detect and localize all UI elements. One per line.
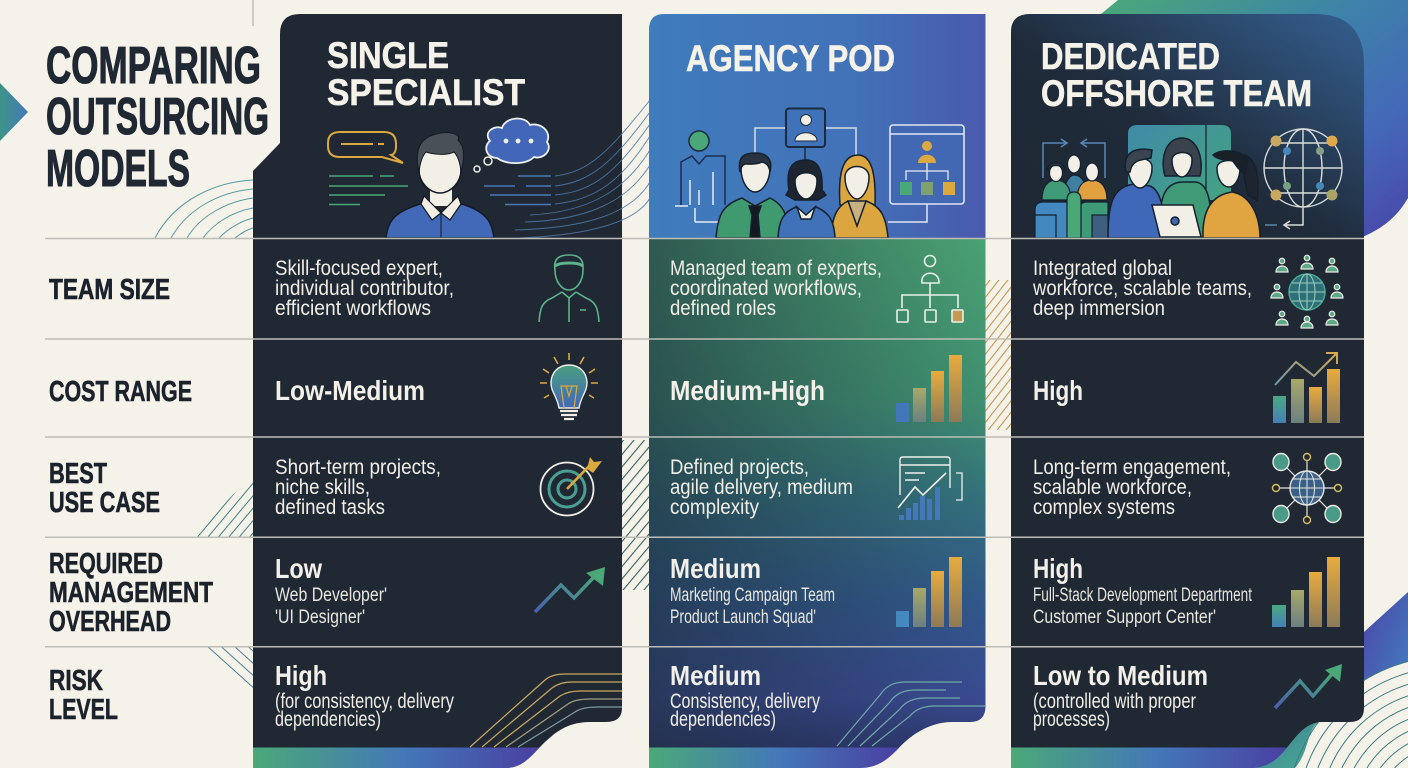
row value: use case single: defined tasks <box>275 495 385 519</box>
row label: cost range: COST RANGE <box>49 376 192 408</box>
row label: required management overhead <box>49 548 213 638</box>
top vertical tick <box>252 0 254 26</box>
row value: cost pod: Medium-High <box>670 375 825 406</box>
icon: target <box>540 457 602 516</box>
icon: window org chart <box>888 125 964 222</box>
row label: risk level: RISK <box>49 665 103 697</box>
heading: single specialist: SINGLE <box>327 35 449 76</box>
left arrow marker <box>0 83 28 141</box>
decorative top-right gradient shape <box>1101 0 1408 238</box>
row value: overhead pod: Medium <box>670 553 761 584</box>
row value: team size offshore <box>1032 256 1252 320</box>
panel: agency pod <box>649 14 986 768</box>
text lines: blue <box>484 176 551 204</box>
icon: speech bubble <box>328 132 403 163</box>
heading: single specialist: SPECIALIST <box>327 72 525 113</box>
row value: overhead pod: Product Launch Squad' <box>670 607 816 628</box>
icon: person outline <box>539 255 599 322</box>
text lines: green <box>329 176 408 204</box>
title <box>46 37 269 198</box>
row value: overhead offshore: Customer Support Center' <box>1033 607 1216 628</box>
row value: risk pod: dependencies) <box>670 707 776 731</box>
row value: team size pod: coordinated workflows, <box>670 276 862 300</box>
row value: cost offshore: High <box>1033 375 1083 406</box>
icon: light bulb <box>540 353 598 419</box>
bar chart: cost pod <box>896 355 962 422</box>
row value: use case pod: agile delivery, medium <box>670 475 853 499</box>
row value: team size pod: defined roles <box>670 296 776 320</box>
row value: overhead single: 'UI Designer' <box>275 607 365 628</box>
row value: team size single <box>275 256 454 320</box>
illustration: main team members <box>1108 138 1260 238</box>
row label: risk level <box>49 665 118 726</box>
decorative hatching between columns <box>622 280 1011 590</box>
panel: single specialist <box>253 14 622 768</box>
illustration: org connectors and ghost person <box>675 128 856 222</box>
heading: dedicated offshore team: DEDICATED <box>1041 36 1220 77</box>
row value: risk pod: Consistency, delivery <box>670 689 820 713</box>
row value: use case pod: complexity <box>670 495 759 519</box>
row value: team size single: Skill-focused expert, <box>275 256 443 280</box>
heading: dedicated offshore team <box>1041 36 1312 114</box>
illustration: small group with arrows <box>1035 139 1108 238</box>
row value: risk offshore: (controlled with proper <box>1033 689 1196 713</box>
row label: best use case: USE CASE <box>49 487 160 519</box>
title: COMPARING <box>46 37 261 95</box>
illustration: three team members <box>716 153 888 238</box>
row value: risk pod: Medium <box>670 660 761 691</box>
row value: risk single <box>275 660 454 731</box>
panel: dedicated offshore team <box>1011 14 1364 768</box>
decorative bottom-right shapes <box>1250 592 1408 768</box>
row value: overhead offshore <box>1033 553 1253 628</box>
row value: overhead single: Low <box>275 553 322 584</box>
title: OUTSURCING <box>46 88 269 146</box>
icon: thought cloud <box>474 119 549 172</box>
row value: risk offshore: Low to Medium <box>1033 660 1208 691</box>
row value: overhead pod: Marketing Campaign Team <box>670 585 835 606</box>
decorative hatching left <box>190 475 253 697</box>
icon: org person box <box>786 108 825 147</box>
row label: required management overhead: REQUIRED <box>49 548 163 580</box>
row value: risk offshore: processes) <box>1033 707 1110 731</box>
row value: team size offshore: workforce, scalable teams, <box>1032 276 1252 300</box>
row value: overhead pod <box>670 553 835 628</box>
decorative arcs left <box>155 180 253 238</box>
row label: risk level: LEVEL <box>49 694 118 726</box>
row value: use case single: Short-term projects, <box>275 455 441 479</box>
bar chart: overhead pod <box>896 557 962 627</box>
heading: dedicated offshore team: OFFSHORE TEAM <box>1041 73 1312 114</box>
icon: dashboard chart <box>898 457 962 520</box>
row value: team size offshore: deep immersion <box>1033 296 1165 320</box>
decorative wave lines <box>515 100 650 238</box>
icon: globe network <box>1264 129 1342 229</box>
row label: required management overhead: OVERHEAD <box>49 606 171 638</box>
row value: overhead single: Web Developer' <box>275 585 387 606</box>
illustration: teal backdrop <box>1128 125 1231 238</box>
row label: team size: TEAM SIZE <box>49 274 170 306</box>
icon: hub globe <box>1272 454 1342 524</box>
row value: use case offshore: scalable workforce, <box>1033 475 1192 499</box>
row label: best use case: BEST <box>49 458 107 490</box>
row value: risk single: High <box>275 660 327 691</box>
row value: overhead offshore: High <box>1033 553 1083 584</box>
icon: trend arrow <box>535 567 605 612</box>
row value: team size pod: Managed team of experts, <box>670 256 882 280</box>
bar chart: overhead offshore <box>1272 557 1340 627</box>
row value: use case offshore: complex systems <box>1033 495 1175 519</box>
row value: risk pod <box>670 660 820 731</box>
row value: team size single: individual contributor, <box>275 276 454 300</box>
row value: team size single: efficient workflows <box>275 296 431 320</box>
heading: single specialist <box>327 35 525 113</box>
row value: use case offshore: Long-term engagement, <box>1033 455 1231 479</box>
bar chart: cost offshore with trend <box>1273 353 1340 423</box>
row label: required management overhead: MANAGEMENT <box>49 577 213 609</box>
illustration: specialist person <box>386 133 494 238</box>
row value: risk single: dependencies) <box>275 707 381 731</box>
heading: agency pod: AGENCY POD <box>686 38 895 79</box>
row value: use case offshore <box>1033 455 1231 519</box>
row value: overhead single <box>275 553 387 628</box>
row value: use case single: niche skills, <box>275 475 370 499</box>
row value: use case pod: Defined projects, <box>670 455 809 479</box>
icon: org tree <box>897 256 963 322</box>
title: MODELS <box>46 140 190 198</box>
row value: risk offshore <box>1033 660 1208 731</box>
row value: cost single: Low-Medium <box>275 375 425 406</box>
row value: team size pod <box>670 256 882 320</box>
icon: global workforce network <box>1271 255 1343 328</box>
row value: team size offshore: Integrated global <box>1033 256 1172 280</box>
row value: overhead offshore: Full-Stack Development Department <box>1033 585 1253 606</box>
row value: use case single <box>275 455 441 519</box>
icon: trend arrow offshore <box>1275 664 1342 708</box>
row value: risk single: (for consistency, delivery <box>275 689 454 713</box>
row value: use case pod <box>670 455 853 519</box>
row label: best use case <box>49 458 160 519</box>
